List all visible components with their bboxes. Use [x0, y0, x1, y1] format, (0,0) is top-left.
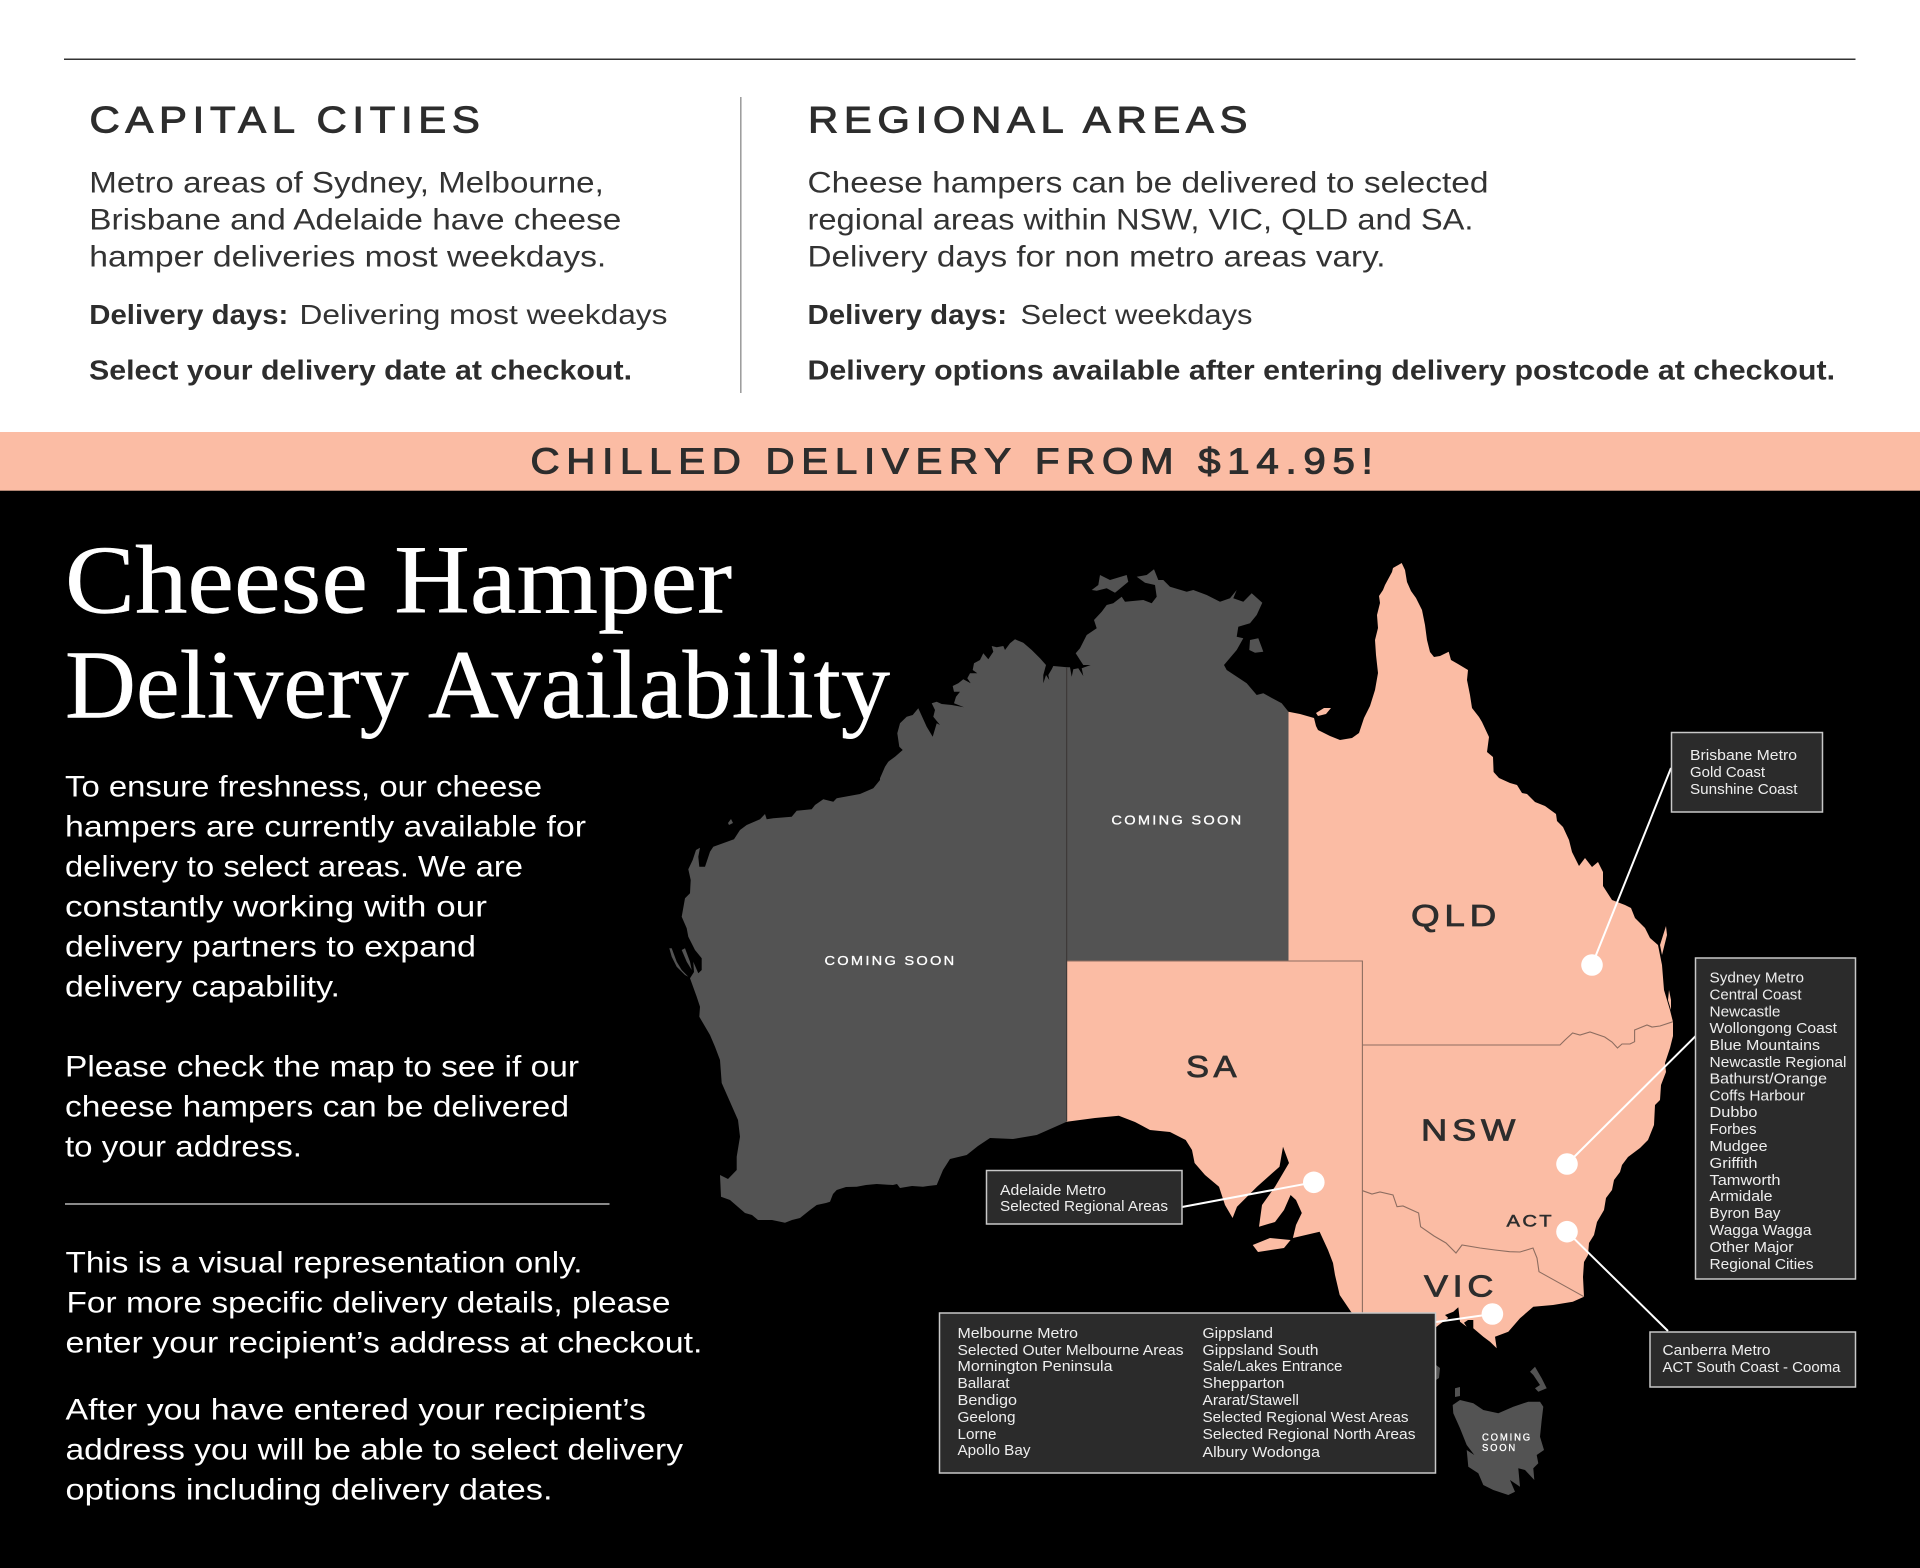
callout box: ACT areas: ACT South Coast - Cooma [1662, 1360, 1841, 1376]
callout box: ACT areas: Canberra Metro [1662, 1343, 1770, 1359]
map islands: Dirk Hartog and Barrow [669, 819, 733, 977]
callout box: New South Wales areas: Wagga Wagga [1710, 1223, 1812, 1239]
title: Delivery Availability [65, 631, 890, 738]
callout box: New South Wales areas: Blue Mountains [1710, 1038, 1820, 1054]
map islands: Melville and Groote [1092, 575, 1263, 653]
callout box: New South Wales areas: Griffith [1710, 1156, 1758, 1172]
state label: COMING SOON Tasmania: COMING [1482, 1431, 1532, 1443]
text block: capital cities description [89, 167, 621, 274]
callout box: New South Wales areas: Forbes [1710, 1122, 1756, 1138]
text block: freshness intro: delivery partners to expand [65, 930, 476, 964]
text block: visual representation note: enter your recipient’s address at checkout. [66, 1327, 702, 1360]
state label: QLD: QLD [1411, 898, 1501, 933]
callout: Victoria [940, 1303, 1503, 1473]
callout box: New South Wales areas: Armidale [1710, 1189, 1772, 1205]
callout box: Queensland areas [1672, 732, 1822, 812]
callout box: Victoria areas: Apollo Bay [958, 1443, 1031, 1459]
state label: COMING SOON WA: COMING SOON [824, 953, 956, 968]
callout box: Victoria areas: Albury Wodonga [1202, 1445, 1321, 1461]
callout: Queensland [1581, 732, 1822, 976]
callout box: Victoria areas: Ararat/Stawell [1202, 1393, 1299, 1409]
callout box: New South Wales areas: Regional Cities [1710, 1257, 1814, 1273]
text block: regional description [808, 167, 1488, 274]
text block: regional delivery days: Select weekdays [1020, 299, 1252, 330]
callout box: New South Wales areas: Dubbo [1710, 1105, 1758, 1121]
map islands: Bass Strait [1436, 1365, 1547, 1397]
callout box: Victoria areas: Selected Outer Melbourne Areas [958, 1343, 1184, 1359]
map region: Northern Territory [1067, 569, 1288, 961]
callout box: Victoria areas: Sale/Lakes Entrance [1202, 1359, 1342, 1375]
text block: regional description: Delivery days for non metro areas vary. [808, 240, 1386, 274]
callout: New South Wales [1556, 958, 1856, 1279]
text block: regional description: Cheese hampers can be delivered to selected [808, 167, 1488, 200]
callout box: Victoria areas: Selected Regional North Areas [1202, 1427, 1416, 1443]
text block: capital cities description: Brisbane and Adelaide have cheese [89, 204, 621, 236]
text block: after entering address [66, 1393, 683, 1506]
callout box: Victoria areas: Lorne [958, 1427, 996, 1443]
callout box: New South Wales areas: Central Coast [1710, 987, 1802, 1003]
callout box: New South Wales areas: Newcastle Regional [1710, 1055, 1846, 1071]
banner: chilled delivery [0, 432, 1920, 491]
state label: NSW: NSW [1421, 1113, 1520, 1148]
callout box: South Australia areas: Adelaide Metro [1000, 1183, 1106, 1199]
text block: freshness intro: To ensure freshness, our cheese [65, 770, 542, 804]
text block: regional delivery days: Delivery days: [808, 299, 1007, 330]
arrow: New South Wales leader [1556, 1036, 1696, 1175]
banner: chilled delivery: CHILLED DELIVERY FROM $14.95! [530, 440, 1380, 481]
state label: VIC: VIC [1424, 1269, 1498, 1304]
callout box: Victoria areas: Gippsland South [1202, 1343, 1318, 1359]
title: Cheese Hamper [65, 527, 732, 634]
text block: capital delivery days [89, 299, 668, 330]
text block: visual representation note: For more specific delivery details, please [66, 1287, 670, 1320]
text block: freshness intro: delivery capability. [65, 970, 340, 1004]
callout box: New South Wales areas: Newcastle [1710, 1004, 1780, 1020]
heading: capital cities: CAPITAL CITIES [90, 100, 486, 141]
callout box: Queensland areas: Sunshine Coast [1690, 782, 1798, 798]
callout box: New South Wales areas: Other Major [1710, 1240, 1794, 1256]
callout box: Victoria areas: Geelong [958, 1410, 1016, 1426]
panel: capital cities [89, 100, 668, 385]
panel: regional areas [808, 100, 1835, 385]
text block: capital cities description: Metro areas of Sydney, Melbourne, [89, 167, 604, 200]
callout box: Victoria areas: Melbourne Metro [958, 1326, 1078, 1342]
callout box: Victoria areas: Bendigo [958, 1393, 1017, 1409]
callout box: Queensland areas: Brisbane Metro [1690, 748, 1797, 764]
state label: COMING SOON Tasmania: SOON [1482, 1442, 1517, 1454]
text block: regional description: regional areas within NSW, VIC, QLD and SA. [808, 204, 1474, 236]
callout box: Victoria areas: Shepparton [1202, 1376, 1284, 1392]
text block: check the map: to your address. [65, 1130, 302, 1164]
arrow: South Australia leader [1182, 1172, 1325, 1207]
map region: Tasmania [1453, 1400, 1544, 1495]
text block: check the map: Please check the map to see if our [65, 1050, 579, 1084]
callout box: New South Wales areas: Byron Bay [1710, 1206, 1781, 1222]
callout box: Victoria areas: Selected Regional West Areas [1202, 1410, 1408, 1426]
callout: South Australia [986, 1170, 1325, 1224]
map region: Queensland, South Australia, New South Wales and Victoria [1067, 563, 1673, 1348]
callout box: Victoria areas: Mornington Peninsula [958, 1359, 1114, 1375]
callout box: Victoria areas: Ballarat [958, 1376, 1010, 1392]
text block: freshness intro: constantly working with our [65, 890, 487, 924]
callout box: New South Wales areas [1696, 958, 1856, 1279]
arrow: Victoria leader [1436, 1303, 1503, 1325]
map of Australia [669, 563, 1673, 1495]
arrow: ACT leader [1556, 1221, 1668, 1331]
text block: check the map: cheese hampers can be delivered [65, 1090, 569, 1124]
callout box: Victoria areas [940, 1313, 1436, 1473]
callout box: New South Wales areas: Bathurst/Orange [1710, 1072, 1827, 1088]
text block: regional checkout note: Delivery options available after entering delivery postcode at checkout. [808, 354, 1835, 385]
text block: visual representation note [66, 1246, 702, 1360]
text block: freshness intro: hampers are currently available for [65, 810, 586, 844]
text block: freshness intro [65, 770, 586, 1004]
text block: after entering address: After you have entered your recipient’s [66, 1393, 646, 1426]
text block: visual representation note: This is a visual representation only. [66, 1246, 582, 1279]
title [65, 527, 890, 738]
state label: SA: SA [1186, 1049, 1241, 1084]
text block: capital checkout note: Select your delivery date at checkout. [89, 354, 632, 385]
map region: Western Australia [682, 639, 1067, 1223]
map islands: Fraser, Stradbroke, Kangaroo, Mornington [1253, 708, 1671, 1252]
callout box: New South Wales areas: Coffs Harbour [1710, 1089, 1805, 1105]
callout box: New South Wales areas: Sydney Metro [1710, 970, 1804, 986]
text block: capital delivery days: Delivery days: [89, 299, 288, 330]
callout box: New South Wales areas: Tamworth [1710, 1173, 1780, 1189]
callout box: South Australia areas: Selected Regional Areas [1000, 1199, 1168, 1215]
state borders [1067, 668, 1673, 1340]
callout box: South Australia areas [986, 1170, 1182, 1224]
text block: freshness intro: delivery to select areas. We are [65, 850, 523, 884]
text block: after entering address: options including delivery dates. [66, 1473, 552, 1506]
arrow: Queensland leader [1581, 768, 1671, 976]
text block: check the map [65, 1050, 579, 1164]
callout box: ACT areas [1650, 1332, 1856, 1387]
callout box: New South Wales areas: Wollongong Coast [1710, 1021, 1837, 1037]
state label: ACT: ACT [1506, 1212, 1554, 1231]
callout box: New South Wales areas: Mudgee [1710, 1139, 1768, 1155]
callout box: Victoria areas: Gippsland [1202, 1326, 1273, 1342]
text block: after entering address: address you will be able to select delivery [66, 1433, 683, 1466]
callout box: Queensland areas: Gold Coast [1690, 765, 1765, 781]
state label: COMING SOON NT: COMING SOON [1111, 812, 1243, 827]
state label: COMING SOON Tasmania [1482, 1431, 1532, 1454]
text block: regional delivery days [808, 299, 1252, 330]
heading: regional areas: REGIONAL AREAS [808, 100, 1253, 141]
text block: capital cities description: hamper deliveries most weekdays. [89, 240, 606, 274]
text block: capital delivery days: Delivering most weekdays [300, 299, 668, 330]
callout: Australian Capital Territory [1556, 1221, 1856, 1387]
